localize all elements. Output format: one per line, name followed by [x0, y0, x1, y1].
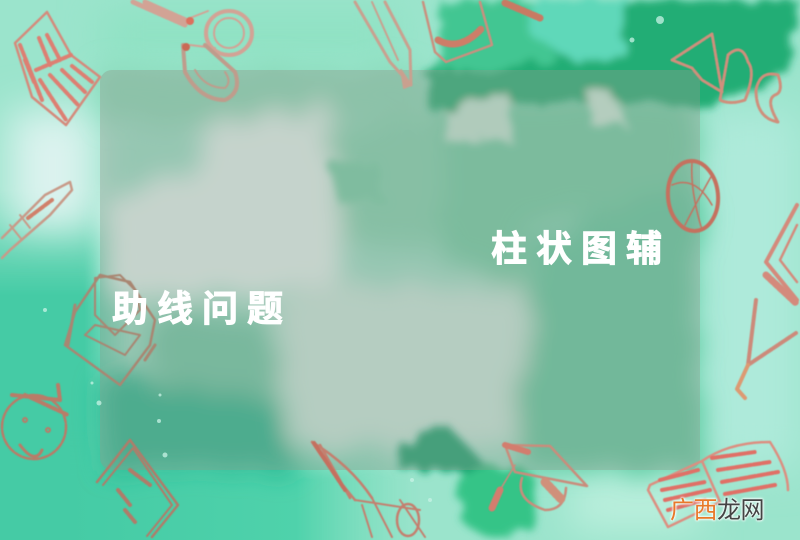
icon: smiling child	[2, 385, 68, 459]
icon: open book bottom right	[648, 442, 788, 527]
icon: basketball	[665, 159, 721, 233]
title: second line: 助线问题	[112, 288, 292, 329]
icon: scissors lower	[312, 442, 425, 537]
icon: ruler right edge	[766, 205, 797, 303]
icon: notebook lower	[97, 440, 178, 537]
title: first line: 柱状图辅	[491, 228, 671, 269]
panel: translucent rounded card	[100, 70, 700, 470]
icon: backpack	[65, 275, 155, 385]
icon: compass	[737, 300, 796, 398]
icon: open notebook top left	[15, 12, 100, 125]
icon: letters ABC	[672, 34, 780, 122]
icon: pen left	[2, 182, 72, 258]
icon: graduation cap	[492, 445, 587, 510]
icon: scissors	[133, 2, 252, 100]
icon: shopping bag top	[423, 2, 540, 62]
icon: pencil top	[355, 2, 411, 88]
watermark: 广西龙网	[670, 497, 764, 524]
speckles	[43, 16, 664, 502]
